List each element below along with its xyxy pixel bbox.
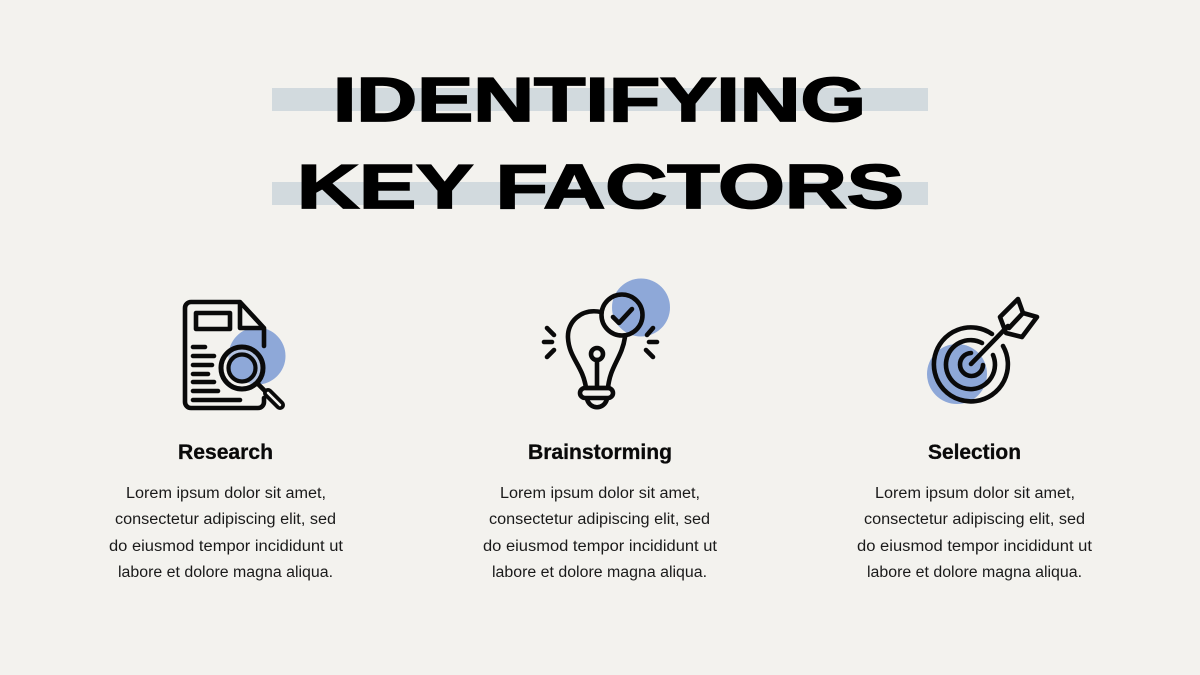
text block: selection: do eiusmod tempor incididunt ut [857,538,1093,555]
panel: selection [857,299,1093,581]
title [272,66,928,222]
heading: selection: Selection [928,441,1021,464]
text block: research [109,485,344,581]
text block: brainstorming: do eiusmod tempor incididunt ut [483,538,718,555]
icon: document with magnifier [185,302,286,408]
title: IDENTIFYING [333,66,866,135]
icon: target with arrow [927,299,1037,404]
heading: research: Research [178,441,273,464]
text block: research: do eiusmod tempor incididunt ut [109,538,344,555]
panel: research [109,302,344,581]
icon: light bulb with check mark [544,278,670,407]
text block: selection: labore et dolore magna aliqua. [867,564,1082,581]
text block: brainstorming: consectetur adipiscing elit, sed [489,511,710,528]
panel: brainstorming [483,278,718,581]
text block: brainstorming: labore et dolore magna aliqua. [492,564,707,581]
text block: research: consectetur adipiscing elit, sed [115,511,336,528]
text block: brainstorming: Lorem ipsum dolor sit amet, [500,485,700,502]
text block: selection [857,485,1093,581]
text block: selection: Lorem ipsum dolor sit amet, [875,485,1075,502]
text block: selection: consectetur adipiscing elit, sed [864,511,1085,528]
text block: brainstorming [483,485,718,581]
title: KEY FACTORS [297,153,904,222]
text block: research: Lorem ipsum dolor sit amet, [126,485,326,502]
text block: research: labore et dolore magna aliqua. [118,564,333,581]
heading: brainstorming: Brainstorming [528,441,672,464]
